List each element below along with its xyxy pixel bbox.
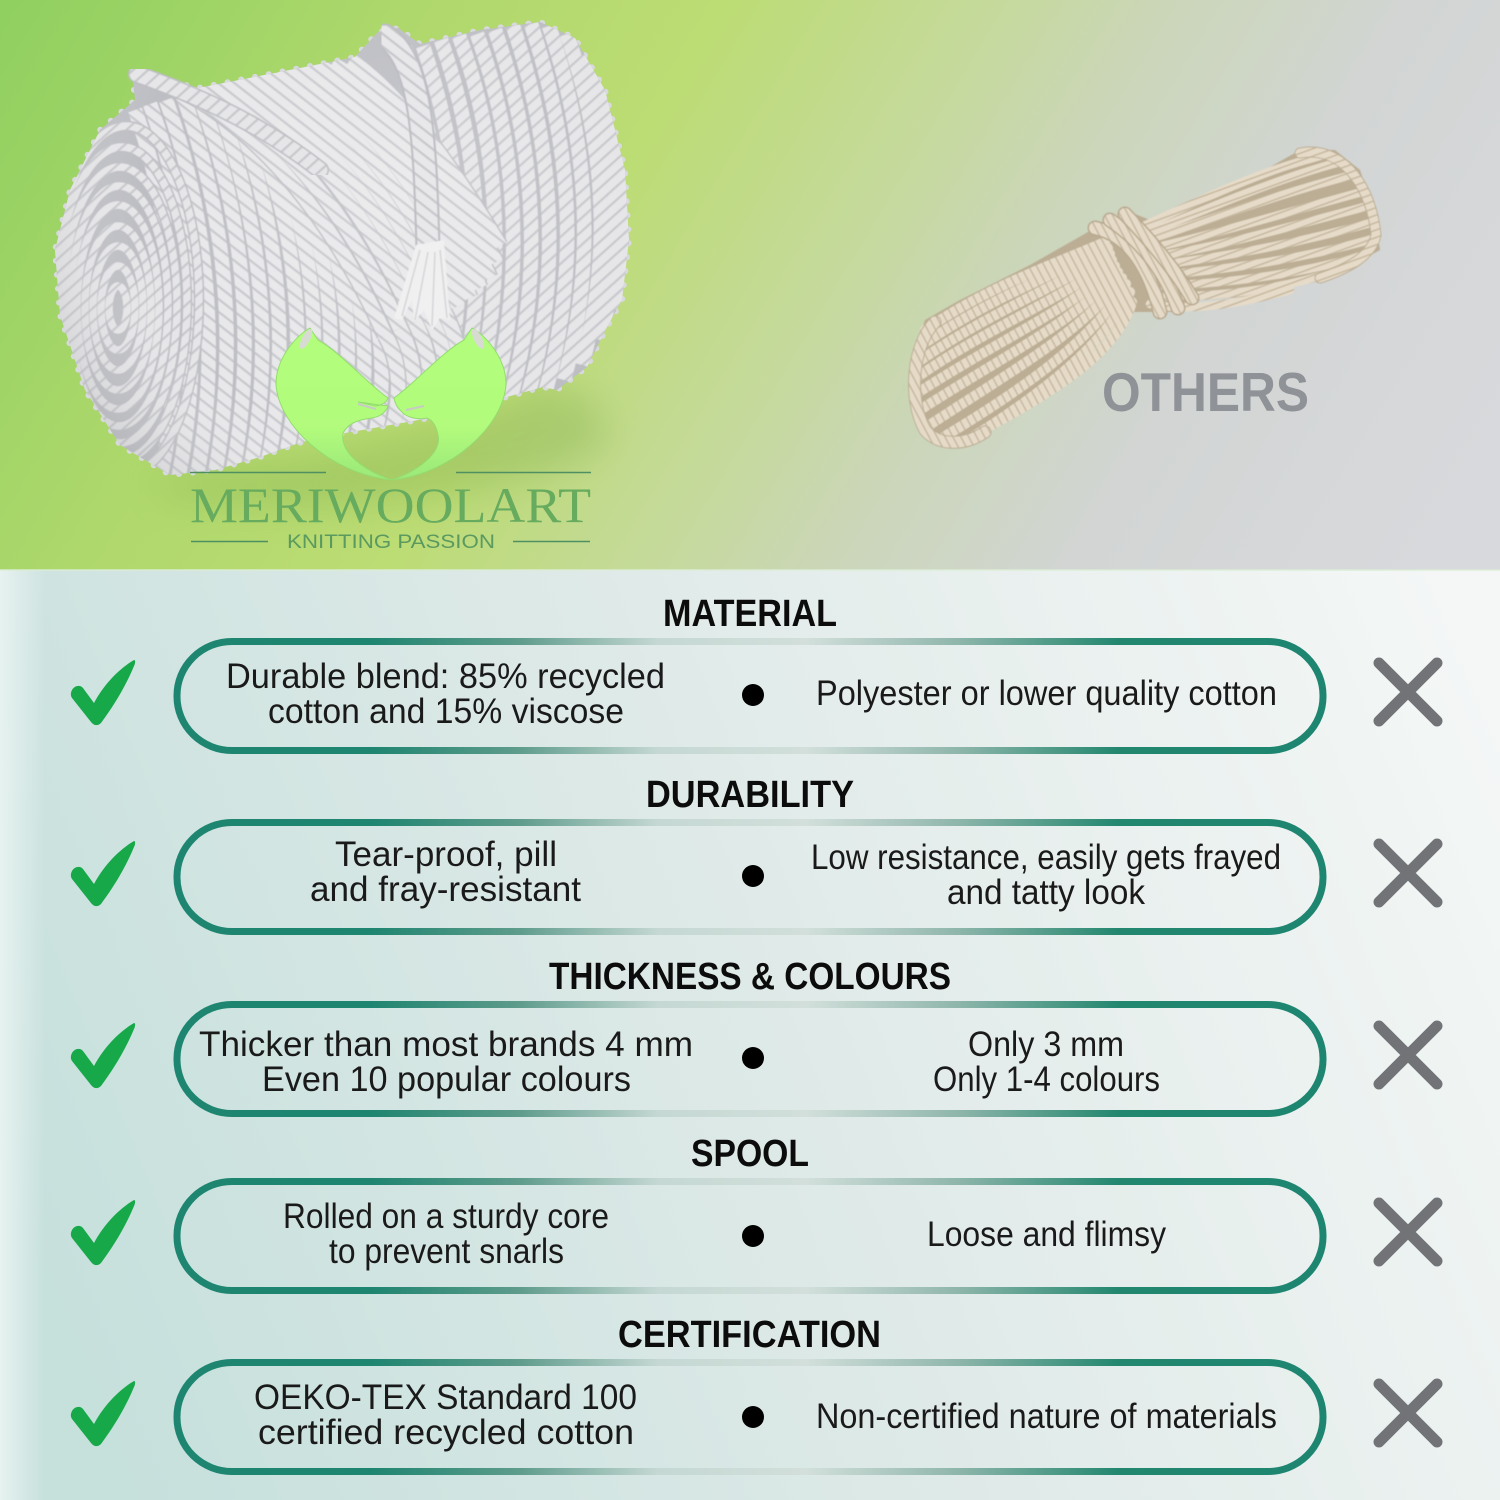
dot xyxy=(742,684,764,706)
icon: cross xyxy=(1379,1026,1437,1084)
left text xyxy=(310,835,581,909)
loose rope end with tassel xyxy=(385,36,450,330)
pill xyxy=(177,1004,1323,1114)
row: Spool xyxy=(71,1133,1437,1290)
panel: top photo comparison background xyxy=(0,0,1500,570)
right text: Only 1-4 colours xyxy=(933,1060,1160,1099)
left text: certified recycled cotton xyxy=(258,1413,634,1452)
pill xyxy=(177,1362,1323,1472)
heading: MATERIAL xyxy=(663,593,837,635)
left text xyxy=(226,657,665,731)
right text: Non-certified nature of materials xyxy=(816,1397,1277,1436)
label: OTHERS: OTHERS xyxy=(1102,361,1309,423)
heading: THICKNESS & COLOURS xyxy=(549,956,951,998)
left text xyxy=(254,1378,637,1452)
icon: cross xyxy=(1379,1384,1437,1442)
row: Certification xyxy=(71,1314,1437,1472)
icon: check xyxy=(71,1023,135,1088)
left text: Even 10 popular colours xyxy=(262,1060,631,1099)
loose rope end left xyxy=(137,74,320,170)
icon: cross xyxy=(1379,663,1437,721)
right text: Loose and flimsy xyxy=(927,1215,1166,1254)
row: Durability xyxy=(71,774,1437,932)
left text: cotton and 15% viscose xyxy=(268,692,624,731)
icon: check xyxy=(71,1200,135,1265)
right text xyxy=(933,1025,1160,1099)
right text xyxy=(811,838,1281,912)
dot xyxy=(742,1225,764,1247)
right text: Low resistance, easily gets frayed xyxy=(811,838,1281,877)
image: beige competitor rope bundle xyxy=(911,150,1380,446)
heading: SPOOL xyxy=(691,1133,809,1175)
icon: check xyxy=(71,660,135,725)
dot xyxy=(742,1406,764,1428)
logo: Meriwoolart mark and wordmark xyxy=(190,327,591,553)
left text xyxy=(199,1025,693,1099)
icon: two cats forming heart xyxy=(276,328,506,480)
logo wordmark: MERIWOOLART xyxy=(190,477,591,533)
panel: comparison table background xyxy=(0,569,1500,1500)
row: Material xyxy=(71,593,1437,750)
dot xyxy=(742,1047,764,1069)
right text: Polyester or lower quality cotton xyxy=(816,674,1277,713)
left text: Durable blend: 85% recycled xyxy=(226,657,665,696)
image: white rope spool xyxy=(40,10,640,506)
left text: Rolled on a sturdy core xyxy=(283,1197,609,1236)
left text: and fray-resistant xyxy=(310,870,581,909)
dot xyxy=(742,865,764,887)
pill xyxy=(177,1182,1323,1290)
heading: DURABILITY xyxy=(646,774,854,816)
logo rules xyxy=(190,472,591,542)
left text: OEKO-TEX Standard 100 xyxy=(254,1378,637,1417)
icon: check xyxy=(71,841,135,906)
logo tagline: KNITTING PASSION xyxy=(287,532,495,553)
heading: CERTIFICATION xyxy=(618,1314,881,1356)
icon: cross xyxy=(1379,844,1437,902)
left text: to prevent snarls xyxy=(329,1232,564,1271)
left text: Tear-proof, pill xyxy=(335,835,557,874)
right text: and tatty look xyxy=(947,873,1145,912)
pill xyxy=(177,642,1323,750)
row: Thickness and colours xyxy=(71,956,1437,1114)
left text xyxy=(283,1197,609,1271)
pill xyxy=(177,822,1323,932)
icon: check xyxy=(71,1381,135,1446)
left text: Thicker than most brands 4 mm xyxy=(199,1025,693,1064)
icon: cross xyxy=(1379,1203,1437,1261)
right text: Only 3 mm xyxy=(968,1025,1124,1064)
